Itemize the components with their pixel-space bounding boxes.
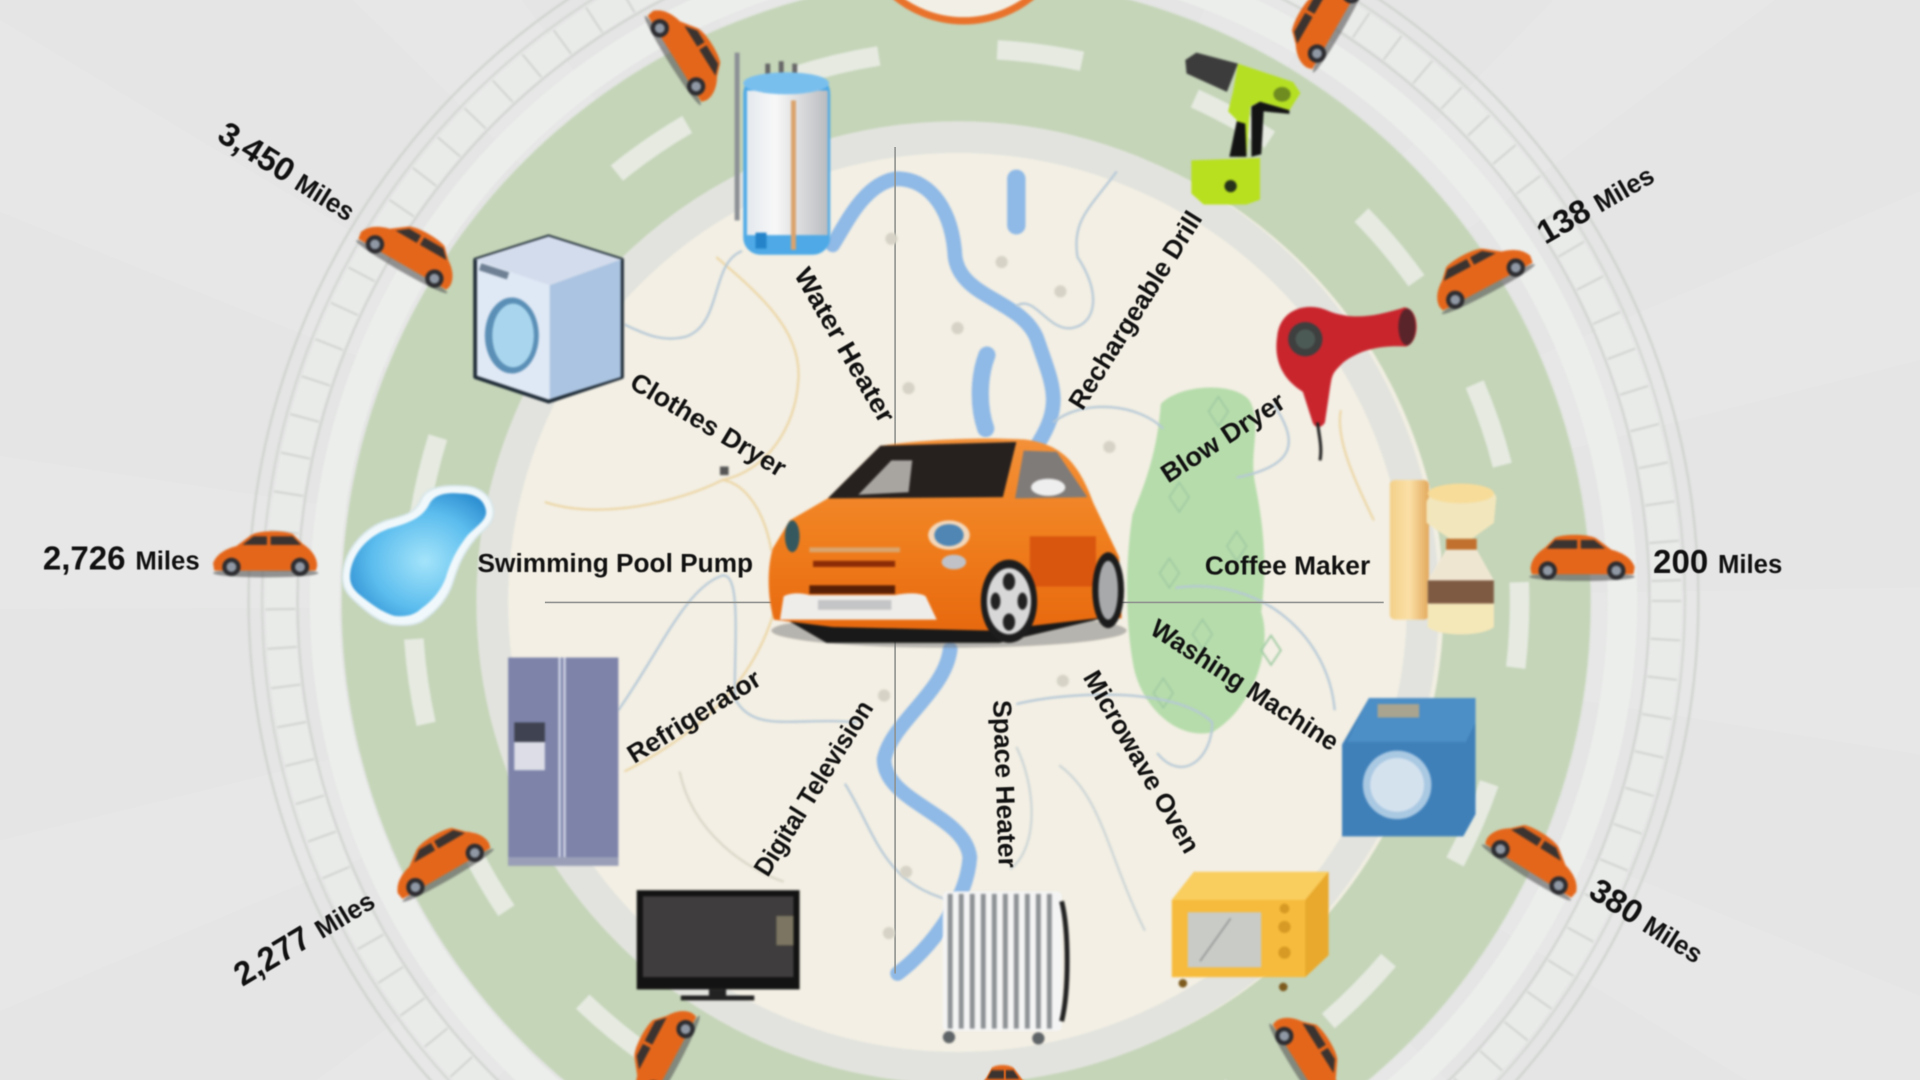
small car: 380 miles bbox=[1479, 809, 1593, 904]
small car: bottom left bbox=[613, 996, 703, 1080]
map: concentric road rings bbox=[249, 0, 1698, 1080]
green ring bbox=[415, 51, 1517, 1080]
label: water heater: Water Heater bbox=[788, 263, 899, 428]
map: green park bbox=[1127, 388, 1281, 733]
map: small grey points bbox=[720, 233, 1116, 939]
small car: 2,726 miles bbox=[213, 531, 318, 577]
miles: 200: 200 Miles bbox=[1653, 544, 1782, 581]
cream inner land bbox=[508, 153, 1407, 1052]
label: rechargeable drill: Rechargeable Drill bbox=[1064, 207, 1208, 415]
label: blow dryer: Blow Dryer bbox=[1156, 388, 1291, 489]
label: refrigerator: Refrigerator bbox=[623, 665, 766, 769]
miles: 2,726: 2,726 Miles bbox=[43, 540, 200, 577]
grey inner road band bbox=[492, 137, 1423, 1068]
icon: blow dryer bbox=[1276, 307, 1417, 460]
icon: washing machine bbox=[1342, 698, 1476, 836]
map: axis cross lines bbox=[545, 147, 1384, 973]
icon: coffee maker bbox=[1390, 480, 1496, 634]
label: digital television: Digital Television bbox=[749, 696, 879, 881]
map: blue river and ponds bbox=[833, 179, 1053, 973]
icon: digital television bbox=[637, 890, 800, 1000]
icon: clothes dryer bbox=[475, 236, 622, 402]
icon: rechargeable drill bbox=[1185, 53, 1300, 204]
small car: bottom right bbox=[1266, 1002, 1361, 1080]
miles: 138: 138Miles bbox=[1531, 156, 1660, 252]
small car: 2,277 miles bbox=[382, 813, 496, 905]
small car: top right bbox=[1277, 0, 1369, 75]
green ring white dashes bbox=[393, 29, 1540, 1080]
label: clothes dryer: Clothes Dryer bbox=[625, 368, 791, 483]
icon: space heater bbox=[943, 891, 1067, 1044]
small car: 3,450 miles bbox=[354, 204, 468, 297]
small car: bottom centre bbox=[978, 1065, 1035, 1080]
label: washing machine: Washing Machine bbox=[1145, 615, 1343, 757]
icon: microwave oven bbox=[1172, 872, 1329, 991]
miles: 2,277: 2,277Miles bbox=[228, 881, 381, 994]
map: thin contour lines bbox=[545, 171, 1374, 931]
main car: orange electric hatchback bbox=[769, 438, 1127, 648]
label: space heater: Space Heater bbox=[987, 700, 1021, 868]
label: coffee maker: Coffee Maker bbox=[1205, 552, 1370, 580]
icon: top orange ring bbox=[856, 0, 1071, 21]
miles: 3,450: 3,450Miles bbox=[211, 115, 363, 229]
icon: water heater bbox=[735, 53, 830, 255]
icon: swimming pool bbox=[343, 486, 493, 625]
outer railway track bbox=[249, 0, 1698, 1080]
miles: 380: 380Miles bbox=[1583, 872, 1711, 971]
label: microwave oven: Microwave Oven bbox=[1077, 666, 1204, 858]
icon: refrigerator bbox=[508, 658, 618, 866]
small car: 200 miles bbox=[1529, 535, 1635, 581]
small car: 138 miles bbox=[1422, 228, 1537, 318]
small car: top left bbox=[641, 0, 736, 108]
label: swimming pool pump: Swimming Pool Pump bbox=[478, 550, 753, 578]
